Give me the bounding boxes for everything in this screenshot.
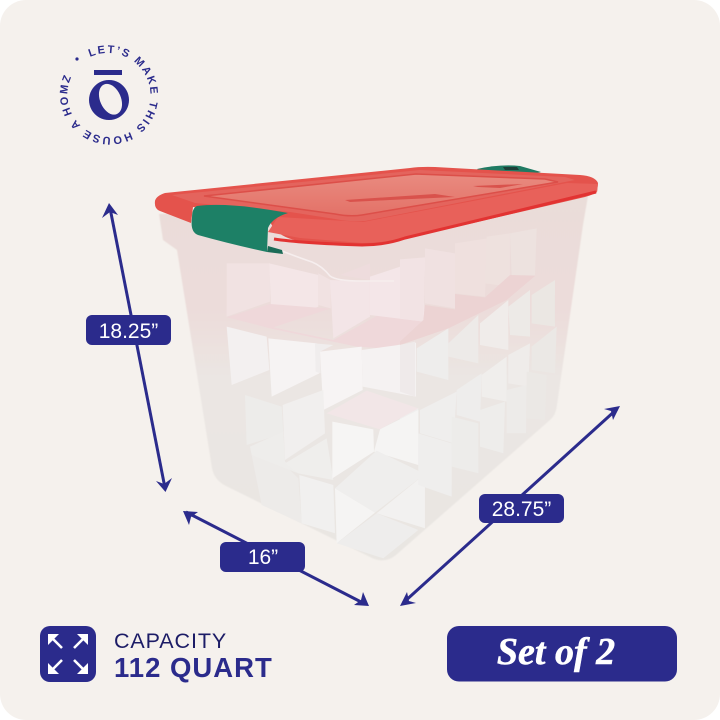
rear green latch (477, 165, 541, 175)
arrow: height dimension (102, 203, 172, 492)
lid recess (172, 170, 575, 221)
capacity text (114, 629, 273, 683)
label: 28.75 (479, 494, 564, 523)
set of 2 badge: Set of 2 (497, 631, 615, 673)
capacity label: CAPACITY (114, 629, 227, 653)
red lid (155, 167, 598, 246)
arrow: width dimension (183, 511, 369, 606)
logo circular text: LET’S MAKE THIS HOUSE A HOMZ (60, 45, 158, 145)
lid slots (345, 194, 455, 202)
label: 16 (220, 542, 305, 572)
right face dividers (400, 228, 557, 480)
front green latch (192, 205, 288, 252)
label: 28.75: 28.75” (492, 498, 551, 521)
clear handle moulding (282, 251, 394, 281)
left face dividers (190, 258, 430, 410)
lid top panel (204, 174, 558, 216)
box body (159, 190, 589, 560)
set of 2 badge (447, 626, 677, 682)
capacity value: 112 QUART (114, 652, 273, 683)
label: 18.25: 18.25” (99, 320, 158, 343)
logo badge (60, 45, 158, 145)
logo mark (89, 70, 129, 120)
storage box photo (155, 165, 598, 560)
lid front band (268, 183, 598, 243)
label: 18.25 (86, 315, 171, 345)
label: 16: 16” (248, 546, 278, 569)
lower dividers (245, 390, 452, 558)
arrow: length dimension (400, 406, 620, 606)
icon: capacity arrows (40, 626, 96, 682)
lid lower edge (274, 192, 596, 245)
logo dot (75, 57, 79, 61)
